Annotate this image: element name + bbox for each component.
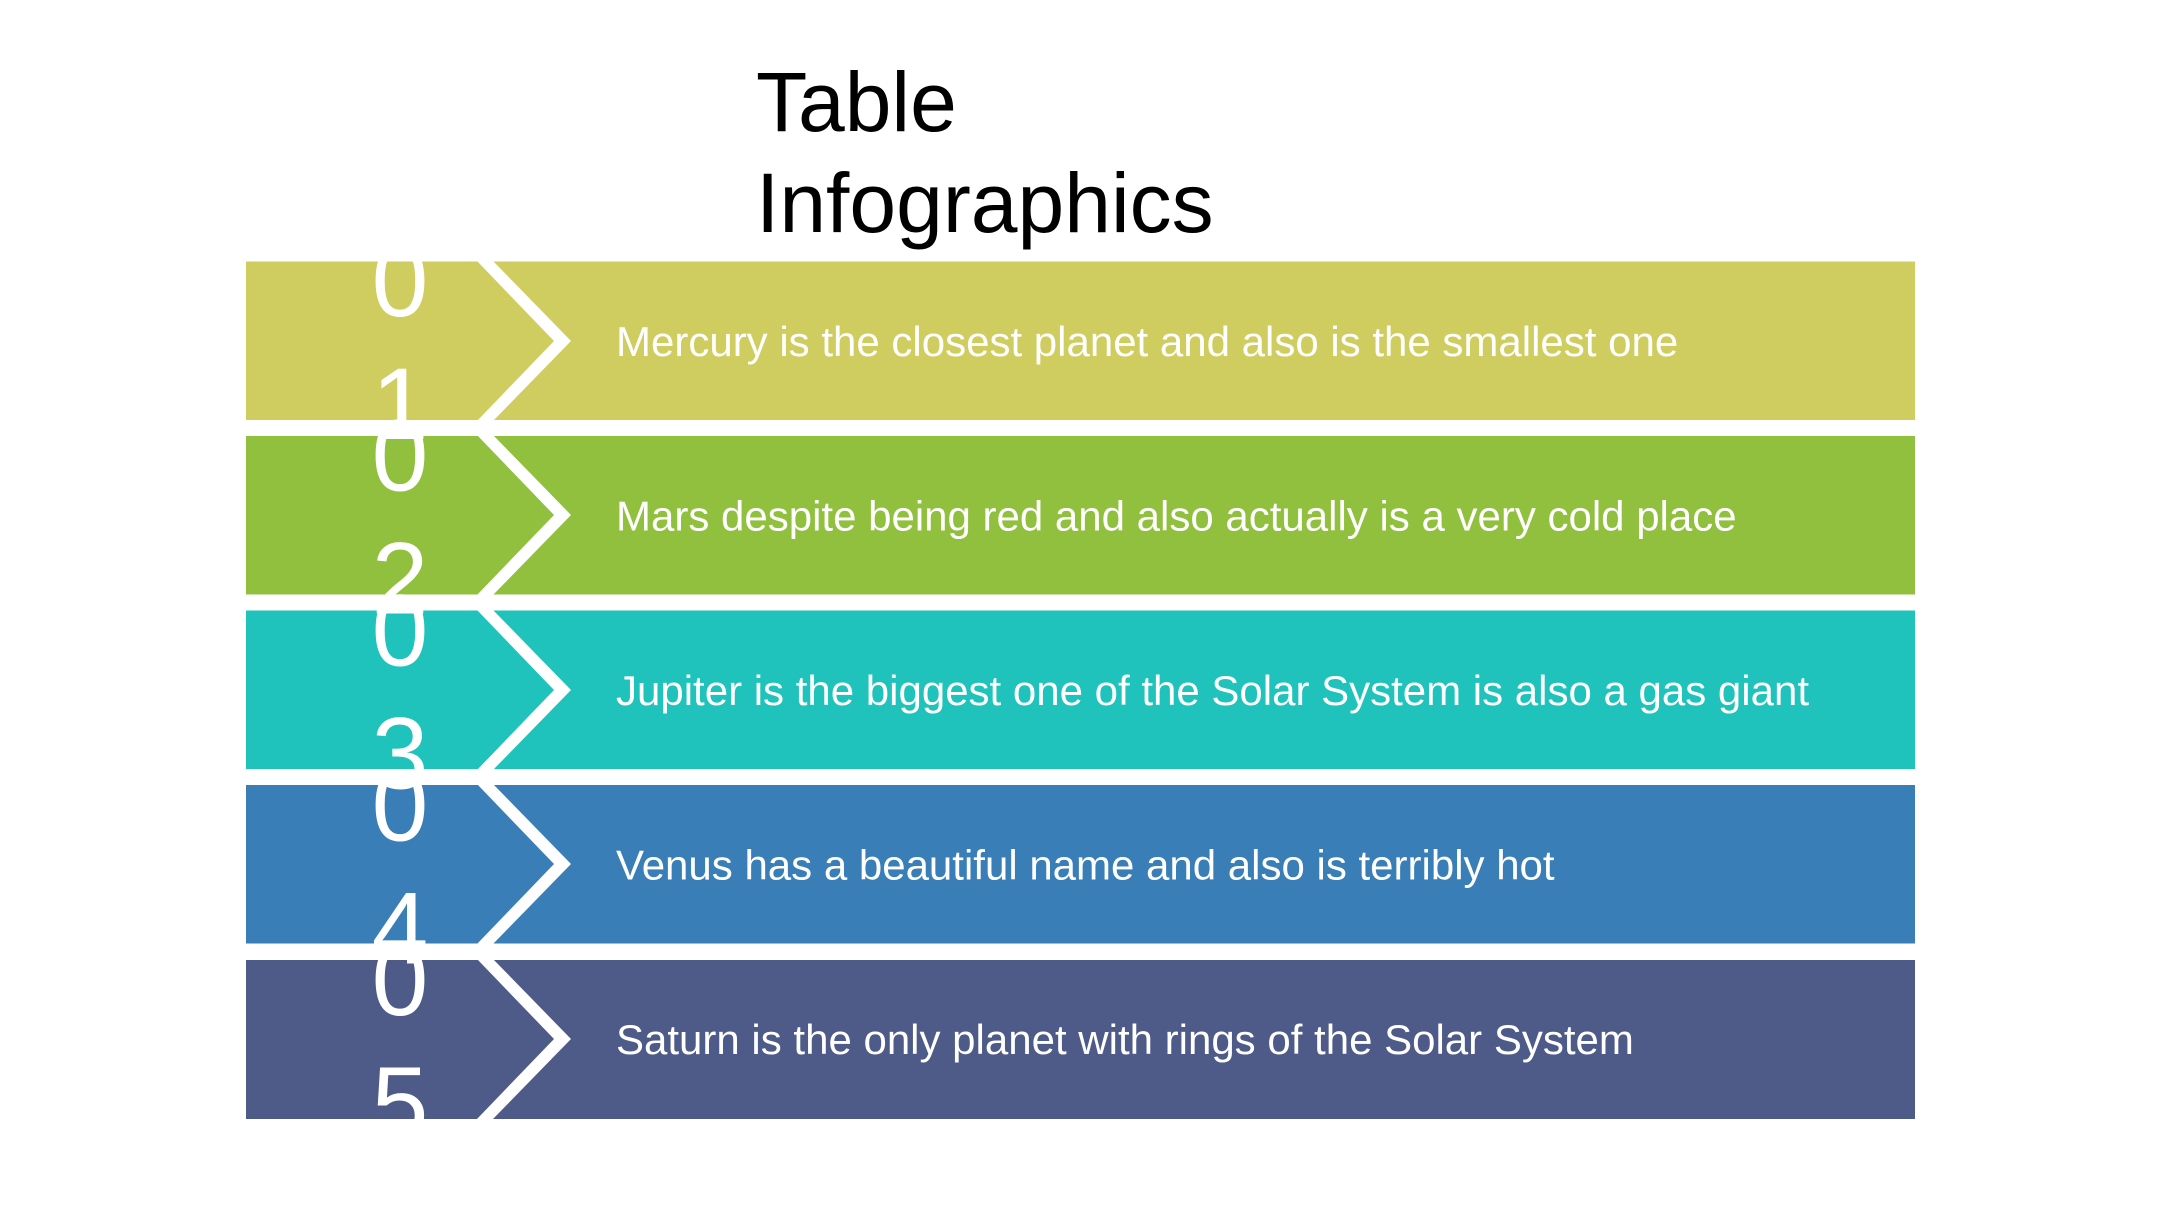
number 01: 1: [372, 347, 428, 461]
icon: chevron 03: [477, 610, 571, 770]
icon: chevron 04: [477, 784, 571, 944]
text: Venus description: Venus has a beautiful name and also is terribly hot: [616, 842, 1555, 888]
number 01: 0: [372, 224, 428, 338]
panel: row 04 Venus: [246, 784, 1915, 944]
text: Mercury description: Mercury is the closest planet and also is the smallest one: [616, 318, 1678, 365]
number 04: 0: [372, 748, 428, 862]
panel: row 01 Mercury: [246, 261, 1915, 421]
panel: row 02 Mars: [246, 435, 1915, 595]
number 05: 5: [372, 1046, 428, 1160]
number 05: [372, 923, 428, 1160]
icon: chevron 05: [477, 959, 571, 1119]
text: Saturn description: Saturn is the only planet with rings of the Solar System: [616, 1016, 1634, 1063]
panel: row 03 Jupiter: [246, 610, 1915, 770]
number 01: [372, 224, 428, 461]
number 02: [372, 398, 428, 636]
title: Table: [756, 55, 957, 149]
number 03: 0: [372, 574, 428, 688]
number 03: [372, 574, 428, 810]
icon: chevron 02: [477, 435, 571, 595]
number 05: 0: [372, 923, 428, 1037]
icon: chevron 01: [477, 261, 571, 421]
title: Infographics: [756, 156, 1214, 250]
number 02: 2: [372, 522, 428, 636]
number 04: 4: [372, 872, 428, 986]
text: Mars description: Mars despite being red and also actually is a very cold place: [616, 492, 1737, 540]
panel: row 05 Saturn: [246, 959, 1915, 1119]
number 02: 0: [372, 398, 428, 512]
number 03: 3: [372, 696, 428, 810]
title: [756, 55, 1214, 250]
number 04: [372, 748, 428, 986]
text: Jupiter description: Jupiter is the biggest one of the Solar System is also a gas giant: [616, 667, 1809, 714]
